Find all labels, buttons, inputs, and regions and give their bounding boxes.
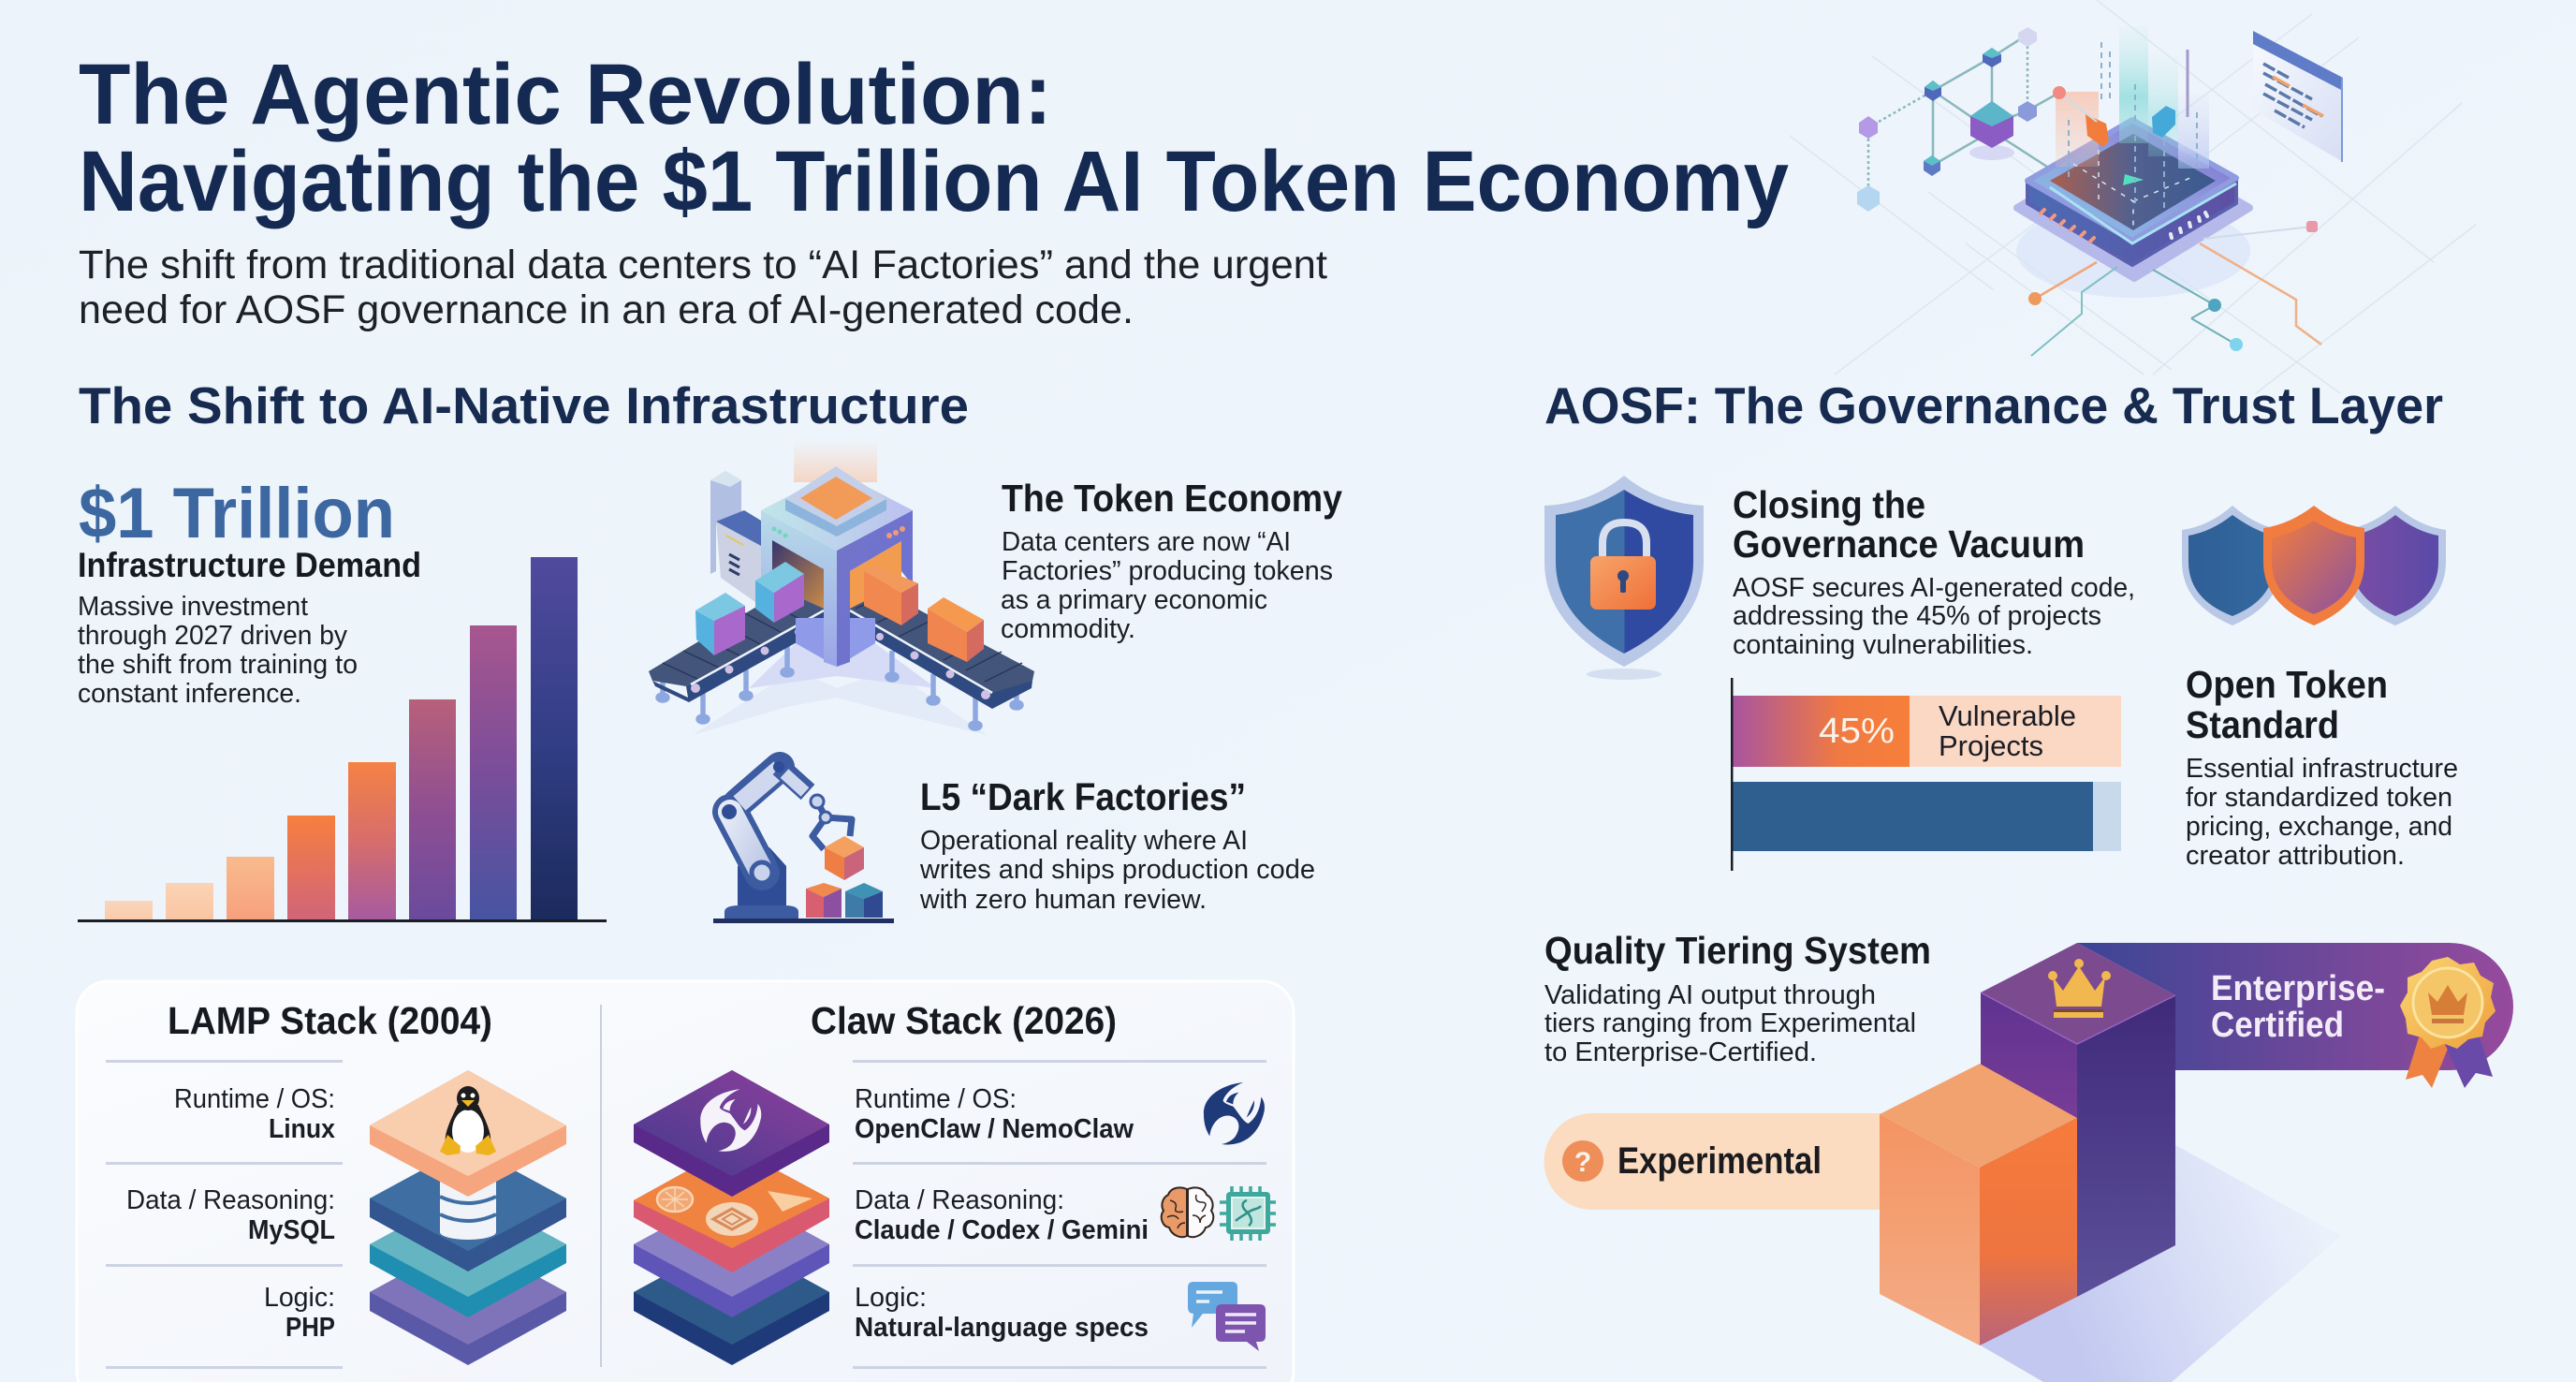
text: the token economy: as a primary economic: [1001, 585, 1267, 615]
circuit traces and dots: [2028, 86, 2321, 356]
enterprise ribbon: Enterprise-: [2211, 969, 2385, 1008]
text: closing the governance vacuum: containing vulnerabilities.: [1733, 630, 2033, 660]
text: closing the governance vacuum: [1733, 483, 2135, 660]
text: quality tiering system: Validating AI output through: [1544, 980, 1876, 1010]
labels: Claw layers: Claude / Codex / Gemini: [855, 1215, 1149, 1245]
chart: vulnerable projects bars: 45%: [1819, 712, 1895, 751]
title: Navigating the $1 Trillion AI Token Economy: [79, 134, 1789, 229]
text: open token standard: creator attribution.: [2186, 841, 2405, 871]
left conveyor belt: [649, 566, 824, 702]
icon: database: [440, 1182, 496, 1240]
chart: quality tier blocks: [1544, 943, 2513, 1382]
icon: shield with padlock: [1544, 476, 1704, 680]
stat: infrastructure demand: through 2027 driven by: [78, 621, 347, 651]
title: [79, 47, 1789, 229]
labels: Claw layers: Logic:: [855, 1283, 927, 1313]
text: L5 dark factories: L5 “Dark Factories”: [920, 775, 1246, 818]
heading: governance and trust layer: AOSF: The Governance & Trust Layer: [1544, 376, 2443, 434]
factory tower: [761, 466, 913, 667]
chip base: [2016, 120, 2250, 298]
subtitle: need for AOSF governance in an era of AI-generated code.: [79, 287, 1134, 332]
light beams: [2056, 26, 2209, 211]
back machine: [710, 471, 761, 609]
icon: token factory: [649, 440, 1034, 735]
pattern marks on reasoning layer: [657, 1187, 812, 1236]
text: closing the governance vacuum: addressing the 45% of projects: [1733, 601, 2101, 631]
stat: infrastructure demand: Massive investment: [78, 592, 308, 622]
labels: LAMP layers: MySQL: [248, 1215, 335, 1245]
icon: Linux penguin: [440, 1086, 496, 1155]
text: closing the governance vacuum: Closing the: [1733, 483, 1925, 526]
text: quality tiering system: [1544, 929, 1931, 1067]
text: the token economy: The Token Economy: [1002, 477, 1342, 520]
experimental pill: Experimental: [1617, 1140, 1822, 1182]
text: open token standard: Essential infrastructure: [2186, 754, 2458, 784]
labels: LAMP layers: Data / Reasoning:: [126, 1185, 335, 1215]
text: closing the governance vacuum: Governance Vacuum: [1733, 522, 2085, 566]
text: L5 dark factories: with zero human review.: [919, 885, 1207, 915]
icon: three shields: [2182, 506, 2446, 625]
icon: claw on top layer: [700, 1089, 761, 1152]
experimental pill: [1544, 1113, 1883, 1210]
subtitle: [79, 243, 1327, 332]
labels: LAMP layers: PHP: [285, 1313, 335, 1343]
floor shadow: [693, 669, 988, 735]
conveyor legs: [658, 646, 1021, 728]
Claw stacked layers: [634, 1070, 829, 1365]
orange block: [1880, 1064, 2077, 1345]
chart: vulnerable projects bars: Projects: [1939, 729, 2043, 762]
icon: chat bubbles: [1188, 1282, 1266, 1351]
text: L5 dark factories: [919, 775, 1315, 915]
icon: claw logo: [1204, 1082, 1265, 1144]
heading: LAMP stack: LAMP Stack (2004): [168, 999, 492, 1042]
icon: circuit chip: [1220, 1186, 1276, 1241]
text: quality tiering system: to Enterprise-Certified.: [1544, 1037, 1817, 1067]
text: L5 dark factories: Operational reality where AI: [920, 826, 1248, 856]
network nodes: [1857, 27, 2059, 212]
icon: brain: [1162, 1187, 1213, 1237]
stat: infrastructure demand: Infrastructure Demand: [78, 546, 421, 584]
chart: vulnerable projects bars: Vulnerable: [1939, 699, 2076, 732]
labels: Claw layers: Data / Reasoning:: [855, 1185, 1064, 1215]
heading: AI-native infrastructure: The Shift to AI-Native Infrastructure: [79, 376, 969, 434]
text: the token economy: Factories” producing tokens: [1002, 556, 1333, 586]
LAMP stacked layers: [370, 1070, 566, 1365]
icon: crown: [2048, 959, 2111, 1018]
text: open token standard: pricing, exchange, and: [2186, 812, 2452, 842]
cubes: [806, 836, 883, 918]
title: The Agentic Revolution:: [79, 47, 1052, 142]
experimental pill: ?: [1574, 1147, 1591, 1178]
labels: LAMP layers: [126, 1084, 335, 1343]
block shadow: [1981, 1145, 2341, 1382]
labels: LAMP layers: Runtime / OS:: [174, 1084, 335, 1114]
labels: Claw layers: OpenClaw / NemoClaw: [855, 1114, 1134, 1144]
text: open token standard: Open Token: [2186, 663, 2388, 706]
text: L5 dark factories: writes and ships production code: [919, 855, 1315, 885]
labels: LAMP layers: Linux: [269, 1114, 335, 1144]
labels: LAMP layers: Logic:: [264, 1283, 335, 1313]
stat: infrastructure demand: $1 Trillion: [79, 474, 395, 553]
icon: robot arm: [713, 761, 894, 923]
heading: Claw stack: Claw Stack (2026): [811, 999, 1117, 1042]
text: open token standard: for standardized token: [2186, 783, 2452, 813]
purple block: [1981, 943, 2175, 1297]
text: quality tiering system: tiers ranging from Experimental: [1544, 1008, 1916, 1038]
panel: LAMP vs Claw stack comparison: [77, 981, 1294, 1382]
stat: infrastructure demand: the shift from training to: [78, 650, 358, 680]
labels: Claw layers: Runtime / OS:: [855, 1084, 1017, 1114]
text: the token economy: Data centers are now “AI: [1002, 527, 1291, 557]
hero illustration: isometric AI chip: [1790, 0, 2476, 393]
code window: [2253, 31, 2343, 162]
enterprise ribbon: Certified: [2211, 1006, 2344, 1045]
chart: vulnerable projects bars: [1731, 678, 2121, 871]
stat: infrastructure demand: [78, 474, 421, 709]
text: closing the governance vacuum: AOSF secures AI-generated code,: [1733, 573, 2135, 603]
text: open token standard: Standard: [2186, 703, 2339, 746]
stat: infrastructure demand: constant inference.: [78, 679, 301, 709]
right conveyor belt: [850, 573, 1034, 709]
token boxes: [695, 562, 984, 662]
text: quality tiering system: Quality Tiering System: [1544, 929, 1931, 972]
labels: Claw layers: [855, 1084, 1149, 1343]
text: the token economy: [1001, 477, 1342, 644]
text: open token standard: [2186, 663, 2458, 871]
icon: gold medal: [2400, 957, 2496, 1088]
text: the token economy: commodity.: [1001, 614, 1135, 644]
labels: Claw layers: Natural-language specs: [855, 1313, 1149, 1343]
bar chart: rising demand: [78, 557, 607, 922]
subtitle: The shift from traditional data centers to “AI Factories” and the urgent: [79, 243, 1327, 287]
enterprise ribbon: [2077, 943, 2513, 1070]
